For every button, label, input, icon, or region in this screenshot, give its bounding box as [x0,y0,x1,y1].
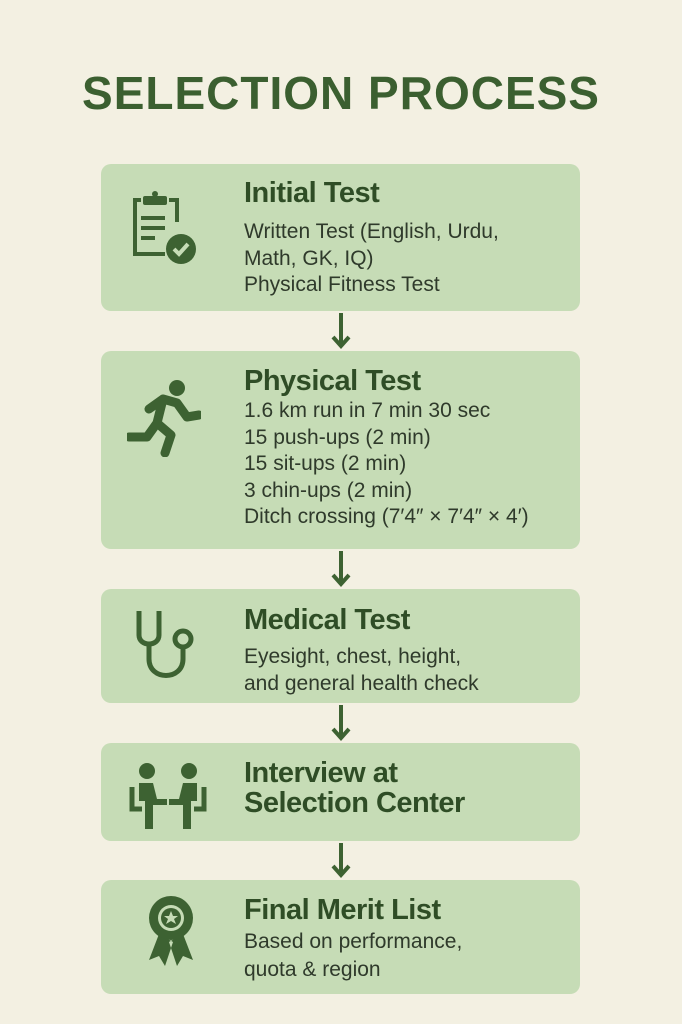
text: Ditch crossing (7′4″ × 7′4″ × 4′) [244,505,529,528]
heading [244,757,465,819]
arrow [332,705,350,741]
text [244,399,529,528]
heading: Physical Test [244,365,421,397]
text: 3 chin-ups (2 min) [244,478,412,502]
text: quota & region [244,958,381,981]
heading: Interview at [244,757,398,789]
heading: Selection Center [244,787,465,819]
icon: interview [130,763,206,829]
title: SELECTION PROCESS [82,67,600,119]
heading: Initial Test [244,177,379,209]
arrow [332,551,350,587]
icon: runner [127,380,201,457]
text: 15 sit-ups (2 min) [244,452,406,475]
text: Written Test (English, Urdu, [244,220,499,243]
text: Physical Fitness Test [244,273,440,296]
text: 15 push-ups (2 min) [244,426,431,448]
text [244,645,479,694]
text [244,220,499,296]
text: Math, GK, IQ) [244,246,374,270]
heading: Medical Test [244,604,410,636]
icon: clipboard [133,191,196,264]
panel: physical test [101,351,580,549]
icon: stethoscope [136,611,194,678]
text: 1.6 km run in 7 min 30 sec [244,399,490,422]
arrow [332,843,350,878]
panel: interview [101,743,580,841]
text: Based on performance, [244,930,462,953]
panel: medical test [101,589,580,703]
heading: Final Merit List [244,894,441,926]
icon: award [149,896,193,966]
panel: final merit list [101,880,580,994]
panel: initial test [101,164,580,311]
text: and general health check [244,672,479,694]
text [244,930,462,981]
text: Eyesight, chest, height, [244,645,461,668]
arrow [332,313,350,349]
